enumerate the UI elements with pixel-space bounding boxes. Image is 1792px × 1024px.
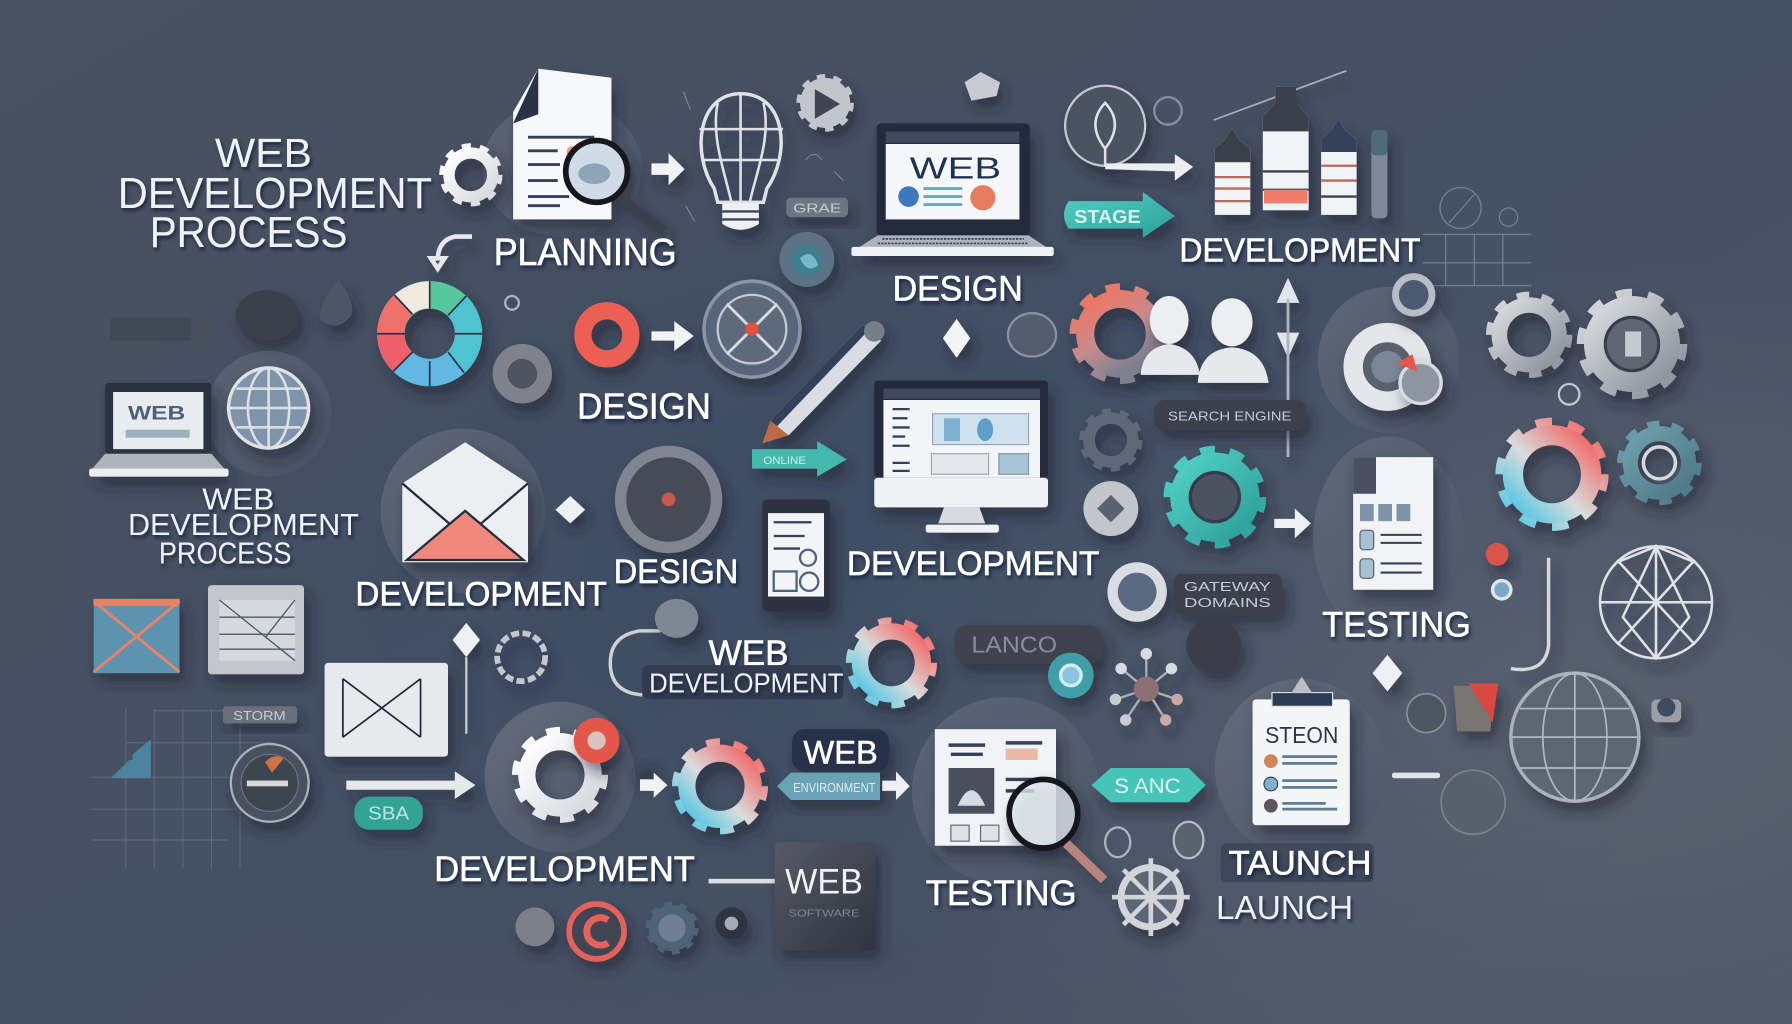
icon: grey gear medium	[1492, 298, 1566, 372]
icon: dark ball	[1186, 618, 1241, 673]
icon: gradient gear	[1077, 291, 1163, 377]
connector dash	[1392, 773, 1440, 778]
dark label card: DOMAINS	[1184, 596, 1271, 610]
icon: large envelope	[402, 442, 528, 562]
icon: small glass ring	[1174, 822, 1203, 858]
icon: gradient gear large	[1503, 426, 1601, 523]
faint scribbles near bulb	[683, 91, 843, 222]
panel: planning	[444, 69, 677, 273]
label: web development process left	[128, 482, 359, 570]
icon: gradient gear lower	[679, 745, 761, 827]
label: taunch: TAUNCH	[1229, 844, 1371, 882]
icon: crosshair wheel	[704, 281, 800, 377]
label: web development centre: WEB	[709, 633, 789, 673]
icon: gradient gear centre	[852, 624, 931, 702]
icon: diamond right	[1373, 655, 1402, 691]
icon: left glass lens	[231, 744, 309, 822]
icon: teal lens small	[1048, 653, 1094, 698]
icon: glass pebble	[655, 599, 698, 638]
icon: wireframe page	[935, 729, 1056, 846]
icon: teal lens	[779, 232, 834, 287]
icon: red ring	[583, 311, 631, 359]
icon: wire sheet	[208, 585, 304, 674]
arrow tag: teal small	[752, 441, 847, 477]
arrow: gear to document	[1274, 509, 1311, 538]
connector line	[709, 879, 775, 883]
arrow tag: stage	[1064, 192, 1175, 238]
pill: SBA: SBA	[368, 802, 410, 823]
icon: dark drop	[320, 280, 352, 326]
arrow tag: blue bar	[777, 773, 880, 800]
card: WEB dark: SOFTWARE	[789, 909, 860, 920]
icon: play gear	[800, 78, 850, 128]
dark pill: launch: LANCO	[971, 632, 1057, 658]
icon: grey gear outline	[1084, 413, 1138, 467]
icon: diamond disc	[1083, 481, 1138, 536]
icon: envelope card	[325, 663, 448, 757]
label: development top: DEVELOPMENT	[1179, 233, 1421, 270]
label: development middle-left: DEVELOPMENT	[355, 576, 607, 614]
panel: testing document lower	[912, 697, 1104, 885]
card: WEB dark: WEB	[785, 862, 863, 902]
icon: white diamond design	[943, 319, 970, 358]
icon: outline gear	[497, 633, 545, 681]
panel: monitor	[874, 381, 1048, 533]
icon: white disc	[1107, 562, 1167, 622]
dark label card	[1174, 574, 1282, 615]
main title: DEVELOPMENT	[118, 170, 432, 218]
curved arrow to donut	[431, 237, 472, 269]
label: testing lower: TESTING	[926, 873, 1077, 913]
icon: red clip	[1454, 683, 1498, 731]
icon: red dot	[1486, 543, 1509, 566]
panel: people with gear	[1077, 291, 1269, 383]
small grey tag left: STORM	[233, 709, 286, 723]
icon: pencil	[762, 321, 885, 443]
faint glass circle	[1441, 770, 1505, 834]
icon: form document	[1353, 457, 1433, 590]
arrow: diamond pin	[453, 623, 480, 734]
pill: SBA	[354, 797, 423, 830]
label: design top: DESIGN	[893, 269, 1023, 309]
icon: small laptop	[89, 383, 229, 477]
label: development centre: DEVELOPMENT	[847, 545, 1099, 583]
arrow: ring to wheel	[651, 321, 694, 351]
icon: dark badge	[235, 290, 299, 341]
icon: slate gear	[1623, 427, 1696, 499]
small ring	[505, 296, 519, 310]
arrow tag: teal small: ONLINE	[763, 455, 806, 467]
panel: envelope development	[381, 429, 545, 593]
icon: dim badge	[1407, 694, 1446, 733]
arrow: small	[640, 773, 667, 798]
icon: user left	[1141, 296, 1200, 375]
icon: envelope flat blue	[94, 599, 179, 673]
icon: small laptop: WEB	[128, 402, 185, 424]
panel: launch clipboard	[1215, 677, 1386, 857]
label: web development process left: WEB	[202, 482, 274, 517]
main title: PROCESS	[150, 209, 347, 257]
icon: phone	[762, 499, 830, 611]
arrow: to testing doc	[882, 771, 910, 800]
icon: small globe	[229, 368, 309, 448]
small rings	[1105, 822, 1203, 858]
icon: red badge	[574, 718, 619, 763]
dark pill label	[1154, 400, 1306, 431]
panel: laptop web design	[851, 123, 1054, 256]
arrow: vertical double	[1277, 278, 1299, 457]
pill: WEB: WEB	[803, 734, 878, 770]
icon: dark bar and drops	[111, 280, 352, 350]
icon: ship wheel	[1112, 858, 1190, 936]
panel: laptop web design: WEB	[910, 150, 1001, 185]
hex tag: launch	[1091, 768, 1206, 802]
label: web development process left: PROCESS	[159, 535, 291, 570]
icon: planning document with magnifier	[513, 69, 664, 231]
small grey glyphs	[1559, 384, 1579, 405]
icon: grey gear large	[1585, 297, 1679, 391]
icon: magnifier	[1009, 779, 1104, 880]
label: development lower: DEVELOPMENT	[434, 849, 695, 889]
label: web development centre	[642, 633, 844, 699]
icon: white gear	[519, 734, 601, 816]
card: WEB dark	[775, 842, 875, 951]
icon: grey knot disc	[493, 344, 552, 403]
dark label card: GATEWAY	[1184, 580, 1272, 594]
icon: small lens	[1397, 354, 1441, 403]
panel: target disc with halo	[1318, 273, 1459, 433]
icon: molecule	[1110, 648, 1183, 726]
small grey tag: GRAE	[793, 202, 841, 216]
label: testing right: TESTING	[1322, 605, 1471, 645]
icon: small top disc	[1392, 273, 1435, 317]
small grey tag left	[223, 706, 297, 723]
icon: clipboard	[1253, 677, 1350, 825]
label: launch: LAUNCH	[1216, 890, 1353, 927]
panel: web laptop with globe	[89, 351, 331, 477]
icon: small tag right	[1651, 698, 1681, 722]
faint grid	[91, 709, 274, 869]
icon: wireframe light bulb	[699, 94, 783, 230]
label: design centre: DESIGN	[614, 553, 738, 591]
pill: development: DEVELOPMENT	[649, 668, 844, 699]
dark pill: launch	[954, 625, 1103, 664]
arrow: planning to bulb	[651, 153, 685, 185]
panel: bar chart bottles	[1214, 71, 1387, 218]
icon: white ring target	[1353, 333, 1422, 401]
blue steps	[111, 739, 151, 778]
panel: testing document	[1313, 437, 1464, 638]
icon: bottom red C	[569, 904, 624, 959]
label: design left: DESIGN	[577, 385, 711, 426]
label: planning: PLANNING	[494, 231, 677, 273]
icon: user right	[1198, 298, 1269, 383]
icon: glass blob	[1008, 313, 1056, 357]
faint sketch with grid	[1423, 187, 1531, 286]
icon: target compass	[1065, 86, 1145, 167]
main title: WEB	[215, 130, 312, 176]
chart: segmented donut	[377, 281, 482, 386]
icon: small diamond	[555, 496, 585, 523]
icon: small blue ring	[1493, 581, 1511, 599]
main title	[118, 130, 432, 257]
icon: dark dial disc	[615, 446, 722, 553]
icon: slim drop	[195, 306, 214, 350]
label: web development process left: DEVELOPMENT	[128, 507, 359, 542]
loop connector	[610, 631, 661, 695]
icon: small cube	[965, 72, 1000, 101]
pill: WEB	[792, 729, 889, 771]
icon: bottom slate gear	[649, 905, 695, 951]
icon: clipboard: STEON	[1265, 722, 1338, 748]
icon: small white gear	[444, 148, 498, 202]
icon: bottom grey disc	[515, 907, 554, 946]
icon: wire globe	[1600, 546, 1712, 658]
icon: spiral ring	[1154, 97, 1182, 125]
dark pill label: SEARCH ENGINE	[1168, 410, 1291, 424]
arrow tag: stage: STAGE	[1074, 206, 1141, 227]
arrow: hook	[1511, 558, 1549, 670]
arrow: to development gear	[346, 771, 475, 799]
arrow tag: blue bar: ENVIRONMENT	[793, 781, 876, 795]
arrow: target to bottles	[1105, 154, 1193, 181]
icon: bottom small disc	[715, 907, 747, 939]
panel: development gear	[485, 702, 635, 853]
icon: teal gear	[1171, 453, 1259, 541]
small grey tag	[786, 198, 848, 217]
icon: big grey globe	[1511, 673, 1639, 801]
hex tag: launch: S ANC	[1114, 773, 1181, 798]
